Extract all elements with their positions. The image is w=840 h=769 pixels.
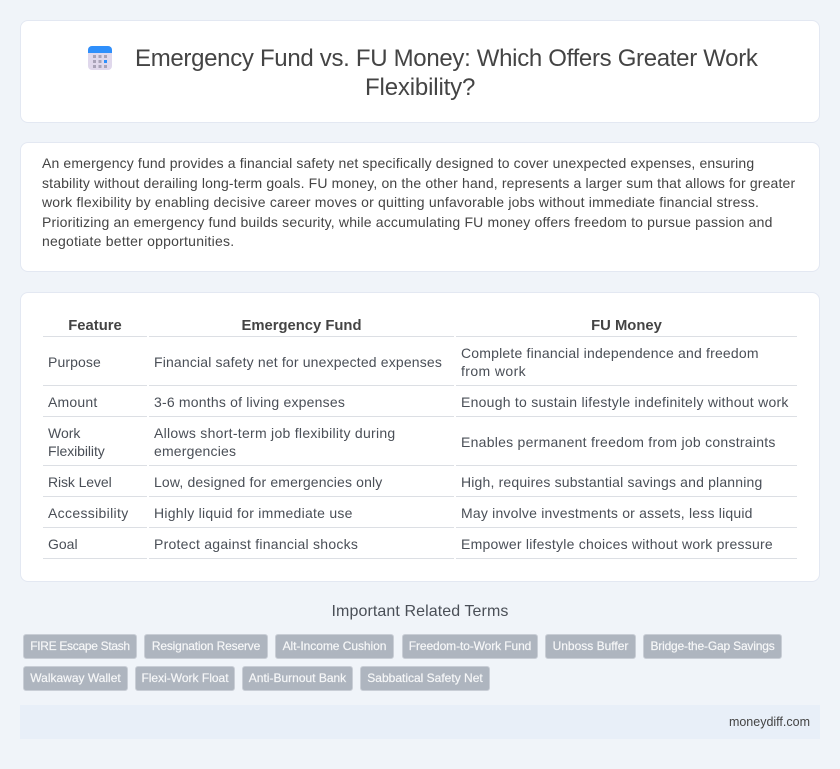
row: goal: Goal xyxy=(48,536,78,552)
panel: title header xyxy=(20,20,820,123)
header: FU money: FU Money xyxy=(591,318,662,334)
table: comparison: Allows short-term job flexibility during xyxy=(154,425,396,441)
tag xyxy=(23,666,128,691)
tag: Alt-Income Cushion xyxy=(283,639,386,653)
row: work flexibility xyxy=(48,425,105,459)
tags: related terms xyxy=(23,634,782,691)
table: comparison: Empower lifestyle choices without work pressure xyxy=(461,536,773,552)
tag xyxy=(360,666,490,691)
table: comparison: May involve investments or assets, less liquid xyxy=(461,505,753,521)
table: comparison: from work xyxy=(461,363,526,379)
title: Flexibility? xyxy=(365,74,475,101)
intro text xyxy=(42,155,795,249)
footer: site name: moneydiff.com xyxy=(729,715,810,729)
tag xyxy=(135,666,235,691)
table: comparison: Complete financial independence and freedom xyxy=(461,345,759,361)
panel: introduction xyxy=(20,142,820,272)
table: comparison: Low, designed for emergencies only xyxy=(154,474,382,490)
tag: Sabbatical Safety Net xyxy=(367,671,483,685)
header: emergency fund: Emergency Fund xyxy=(241,318,362,334)
title: Emergency Fund vs. FU Money: Which Offers Greater Work xyxy=(135,45,758,72)
table: comparison: High, requires substantial savings and planning xyxy=(461,474,762,490)
table: comparison: Enables permanent freedom from job constraints xyxy=(461,434,776,450)
table: comparison: 3-6 months of living expenses xyxy=(154,394,345,410)
row: work flexibility: Flexibility xyxy=(48,443,105,459)
tag: Anti-Burnout Bank xyxy=(249,671,346,685)
tag xyxy=(275,634,394,659)
row: purpose: Purpose xyxy=(48,354,101,370)
tag: FIRE Escape Stash xyxy=(30,639,130,653)
table: comparison: emergencies xyxy=(154,443,236,459)
intro text: stability without derailing long-term goals. FU money, on the other hand, represents a larger sum that allows for greater xyxy=(42,174,795,190)
tag: Bridge-the-Gap Savings xyxy=(650,639,775,653)
tag: Walkaway Wallet xyxy=(30,671,121,685)
row: accessibility: Accessibility xyxy=(48,505,129,521)
header: feature: Feature xyxy=(68,318,122,334)
table: comparison: Highly liquid for immediate use xyxy=(154,505,353,521)
intro text: negotiate better opportunities. xyxy=(42,233,234,249)
row: risk level: Risk Level xyxy=(48,474,112,490)
row: amount: Amount xyxy=(48,394,97,410)
tag: Resignation Reserve xyxy=(152,639,260,653)
intro text: work flexibility by enabling decisive career moves or quitting unfavorable jobs without immediate financial stress. xyxy=(42,194,759,210)
title xyxy=(135,45,758,101)
table: comparison xyxy=(43,318,797,559)
row: work flexibility: Work xyxy=(48,425,80,441)
tag xyxy=(643,634,782,659)
icon: calendar xyxy=(88,46,112,70)
tag xyxy=(23,634,137,659)
table: comparison: Enough to sustain lifestyle indefinitely without work xyxy=(461,394,789,410)
tag: Unboss Buffer xyxy=(553,639,628,653)
table: comparison: Protect against financial shocks xyxy=(154,536,358,552)
tag: Freedom-to-Work Fund xyxy=(409,639,531,653)
intro text: Prioritizing an emergency fund builds security, while accumulating FU money offers freedom to pursue passion and xyxy=(42,214,773,230)
heading: important related terms: Important Related Terms xyxy=(332,603,508,620)
tag xyxy=(242,666,353,691)
footer bar xyxy=(20,705,820,739)
tag xyxy=(144,634,268,659)
tag xyxy=(545,634,636,659)
table: comparison: Financial safety net for unexpected expenses xyxy=(154,354,442,370)
tag: Flexi-Work Float xyxy=(141,671,229,685)
intro text: An emergency fund provides a financial safety net specifically designed to cover unexpected expenses, ensuring xyxy=(42,155,754,171)
tag xyxy=(402,634,538,659)
panel: comparison table xyxy=(20,292,820,582)
